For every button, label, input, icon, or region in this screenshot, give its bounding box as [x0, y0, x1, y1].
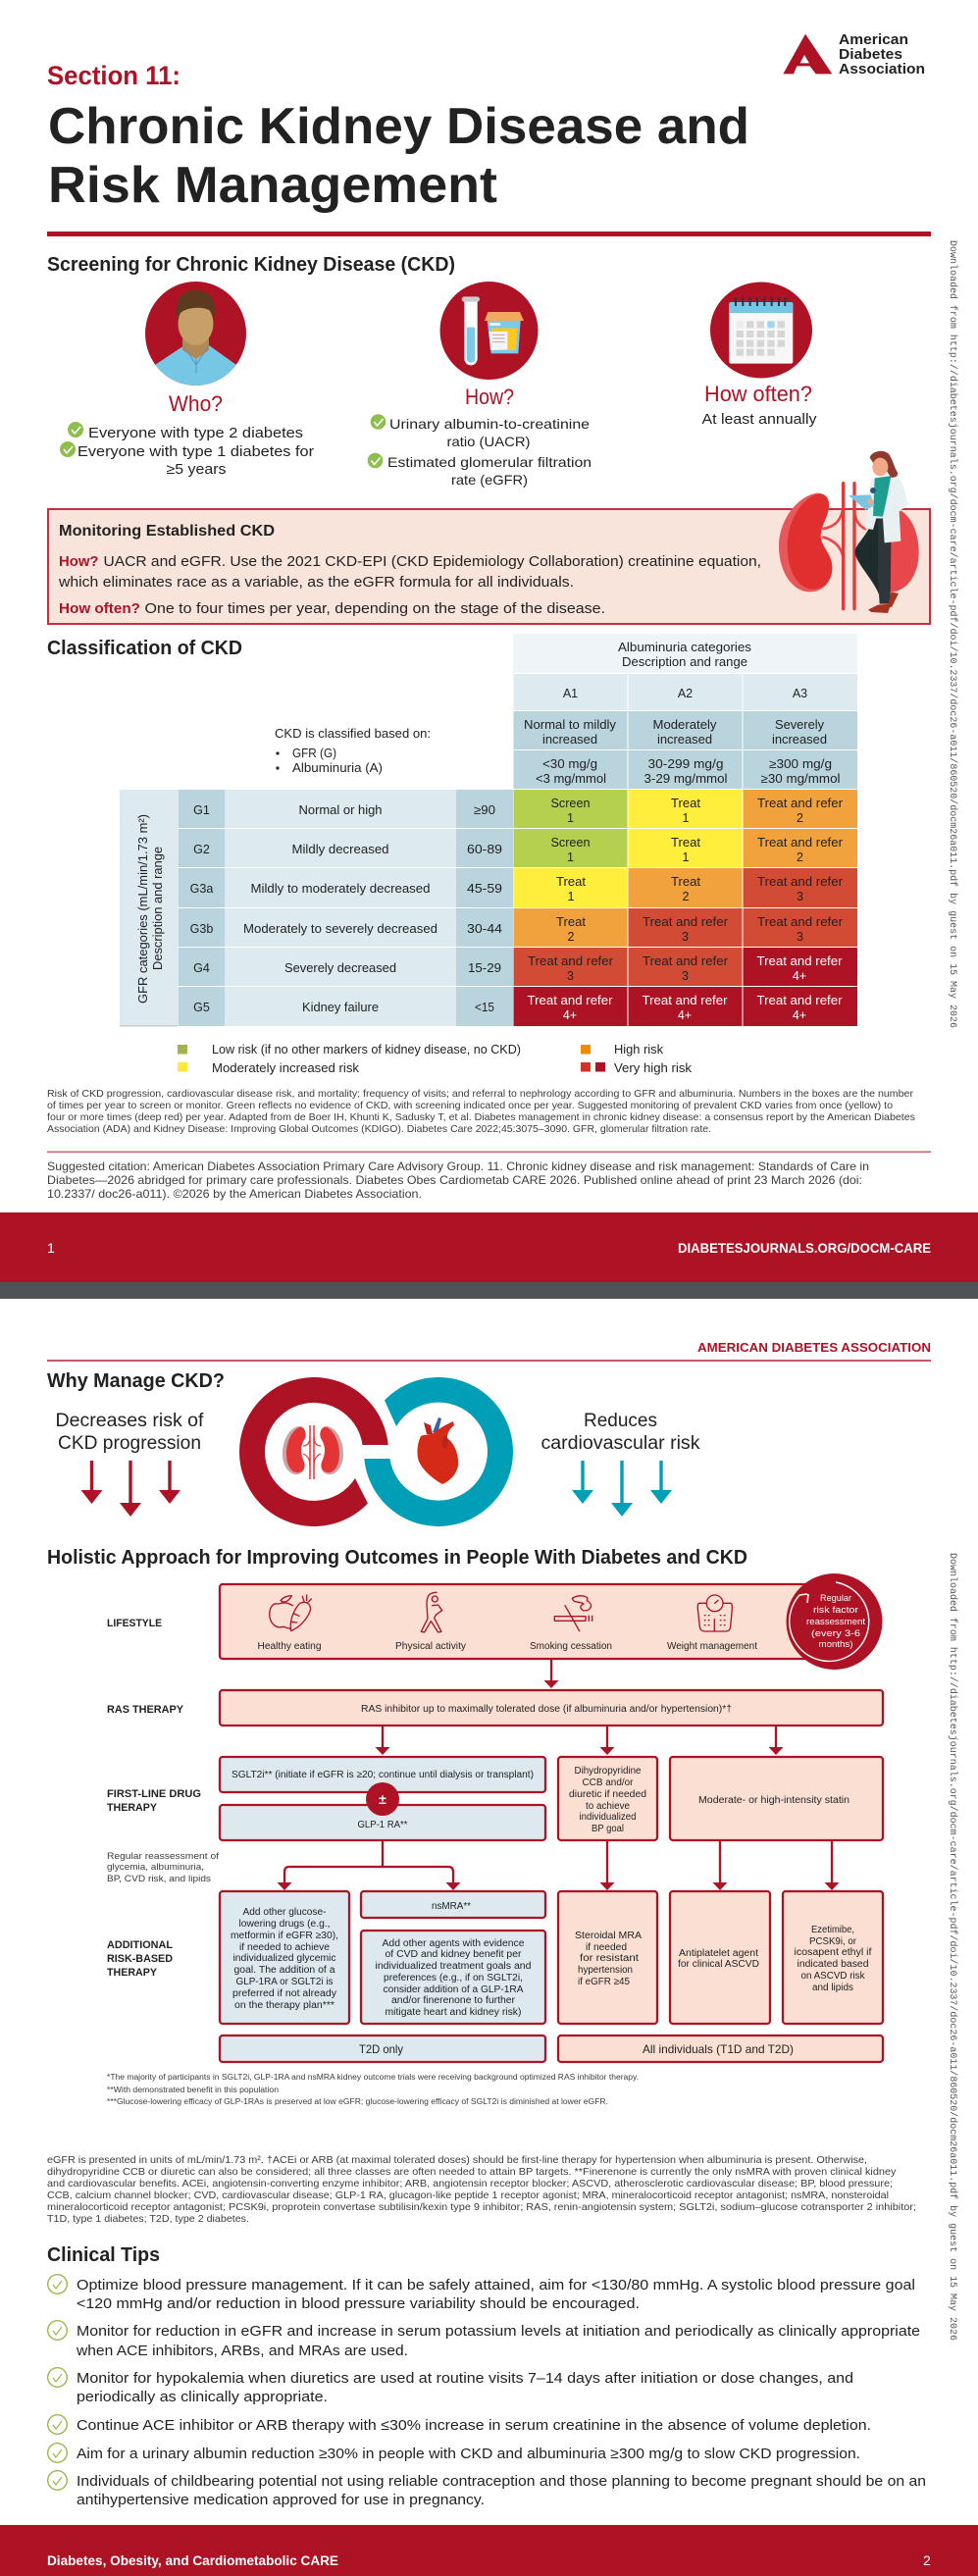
box: other glucose-lowering drugs	[220, 1891, 349, 2024]
box: steroidal MRA	[558, 1891, 657, 2024]
heading: who: Who?	[169, 391, 223, 416]
box: other glucose-lowering drugs: if needed to achieve	[239, 1942, 330, 1953]
table row: G5: Treat and refer	[757, 994, 842, 1007]
text: decreases risk: CKD progression	[58, 1433, 201, 1454]
text: decreases risk: Decreases risk of	[55, 1411, 204, 1431]
arrow: lifestyle to RAS	[543, 1660, 559, 1688]
text: who two	[77, 444, 314, 478]
box: steroidal MRA: Steroidal MRA	[575, 1931, 642, 1941]
box: other glucose-lowering drugs: goal. The addition of a	[233, 1965, 335, 1976]
vertical download note: page 2: Downloaded from http://diabetesjournals.org/docm-care/article-pdf/doi/10.2337/doc26-a011/860520/docm26a011.pdf by guest on 15 May 2026	[948, 1553, 958, 2341]
box: antiplatelet agent: Antiplatelet agent	[679, 1948, 758, 1959]
icon: healthy eating	[270, 1595, 311, 1631]
box: dihydropyridine CCB: CCB and/or	[583, 1777, 634, 1788]
label: additional risk-based therapy: ADDITIONAL	[107, 1939, 173, 1951]
table row: G2: Treat and refer	[757, 836, 843, 850]
table row: G1: Normal or high	[298, 803, 383, 817]
table row: G2: Mildly decreased	[292, 843, 389, 856]
text: CKD is classified based on: Albuminuria (A)	[292, 761, 383, 775]
box: SGLT2i	[220, 1757, 545, 1792]
box: GLP-1 RA	[220, 1805, 545, 1840]
label: RAS therapy: RAS THERAPY	[107, 1704, 184, 1716]
arrows: red downward	[80, 1461, 180, 1517]
heading: how: How?	[465, 385, 514, 409]
text: flowchart footnotes: ***Glucose-lowering efficacy of GLP-1RAs is preserved at low eGFR; glucose-lowering efficacy of SGLT2i is diminished at lower eGFR.	[107, 2097, 608, 2106]
box: other glucose-lowering drugs: preferred if not already	[232, 1988, 336, 1999]
text: suggested citation	[47, 1159, 869, 1201]
tip 3	[48, 2368, 853, 2405]
table row: G3a: Treat	[556, 875, 587, 889]
table header: A3 column	[744, 674, 857, 789]
icon: check	[368, 453, 383, 468]
table header: A3 column: ≥300 mg/g	[769, 757, 832, 771]
list: clinical tips	[48, 2275, 926, 2508]
box: antiplatelet agent	[670, 1891, 770, 2024]
table header: A3 column: Severely	[775, 718, 825, 732]
box: steroidal MRA: if eGFR ≥45	[578, 1977, 630, 1987]
legend: risk levels: Low risk (if no other markers of kidney disease, no CKD)	[212, 1043, 521, 1056]
table row: G2	[179, 829, 857, 867]
logo: American Diabetes Association	[783, 31, 925, 77]
heading: monitoring: Monitoring Established CKD	[59, 523, 275, 540]
text: CKD is classified based on: CKD is classified based on:	[275, 727, 431, 741]
table row: G4: Treat and refer	[643, 954, 728, 968]
box: ezetimibe: on ASCVD risk	[800, 1971, 865, 1982]
tip 1: <120 mmHg and/or reduction in blood pressure variability should be encouraged.	[77, 2295, 640, 2312]
table row: G3a: Treat	[671, 875, 701, 889]
tip 1	[48, 2275, 915, 2312]
heading: clinical tips: Clinical Tips	[47, 2244, 160, 2266]
text: healthy eating: Healthy eating	[257, 1641, 322, 1652]
table row: G3a: Treat and refer	[757, 875, 843, 889]
text: reduces risk	[541, 1411, 700, 1454]
box: other glucose-lowering drugs: GLP-1RA or SGLT2i is	[235, 1977, 334, 1987]
panel: how often	[702, 283, 817, 428]
table row: G2: 2	[797, 850, 803, 864]
icon: heart	[418, 1417, 458, 1484]
text: flowchart footnotes	[107, 2073, 639, 2106]
text: weight management: Weight management	[667, 1641, 757, 1652]
text: uacr: Urinary albumin-to-creatinine	[389, 416, 590, 432]
box: other agents: and/or finerenone to further	[391, 1995, 516, 2006]
table row: G1: Screen	[551, 797, 591, 810]
icon: plus-minus badge	[366, 1782, 399, 1816]
title	[48, 98, 749, 214]
footer: page 1: DIABETESJOURNALS.ORG/DOCM-CARE	[678, 1241, 931, 1256]
box: nsMRA	[361, 1891, 545, 1918]
text: table footnote: Association (ADA) and Kidney Disease: Improving Global Outcomes (KDIGO). Diabetes Care 2022;45:3075–3090. GFR, glomerular filtration rate.	[47, 1123, 711, 1135]
text: abbreviations note: eGFR is presented in units of mL/min/1.73 m². †ACEi or ARB (at maximal tolerated doses) should be first-line therapy for hypertension when albuminuria is present. Otherwise,	[47, 2154, 867, 2166]
box: other glucose-lowering drugs: lowering drugs (e.g.,	[239, 1919, 330, 1930]
box: other agents: of CVD and kidney benefit per	[385, 1949, 522, 1960]
box: ezetimibe: and lipids	[812, 1983, 853, 1993]
box: steroidal MRA: for resistant	[580, 1953, 639, 1964]
text: who two: ≥5 years	[167, 462, 226, 478]
section label: Section 11:	[47, 61, 180, 90]
text: regular reassessment: glycemia, albuminuria,	[107, 1862, 204, 1873]
table row: G1: G1	[193, 803, 210, 817]
table row: G3b: Moderately to severely decreased	[243, 922, 438, 936]
table row: G4: 3	[682, 969, 689, 983]
box: dihydropyridine CCB: Dihydropyridine	[575, 1766, 642, 1777]
tip 1: Optimize blood pressure management. If it can be safely attained, aim for <130/80 mmHg. A systolic blood pressure goal	[77, 2277, 915, 2293]
table row: G4: Severely decreased	[284, 961, 396, 975]
heading: why manage CKD: Why Manage CKD?	[47, 1370, 225, 1392]
text: who two: Everyone with type 1 diabetes for	[77, 444, 314, 460]
box: statin: Moderate- or high-intensity statin	[698, 1795, 849, 1806]
heading: how often: How often?	[704, 382, 812, 406]
table row: G4: 3	[567, 969, 574, 983]
table row: G3a: 3	[797, 890, 803, 903]
callout: regular risk factor reassessment: months)	[818, 1639, 853, 1650]
table row: G3a: 45-59	[467, 882, 502, 896]
icon: physical activity	[421, 1592, 442, 1632]
box: other agents: Add other agents with evidence	[383, 1938, 525, 1949]
box: ezetimibe: Ezetimibe,	[811, 1925, 854, 1935]
tip 2: when ACE inhibitors, ARBs, and MRAs are used.	[76, 2343, 408, 2359]
box: other agents	[361, 1931, 545, 2024]
table header: A2 column: 3-29 mg/mmol	[643, 772, 728, 786]
text: suggested citation: Diabetes—2026 abridged for primary care professionals. Diabetes Obes Cardiometab CARE 2026. Published online ahead of print 23 March 2026 (doi:	[47, 1173, 862, 1187]
text: abbreviations note: dihydropyridine CCB or diuretic can also be considered; all three classes are often needed to attain BP targets. **Finerenone is currently the only nsMRA with proven clinical kidney	[47, 2166, 897, 2178]
ring: heart	[364, 1377, 513, 1526]
text: egfr: rate (eGFR)	[451, 472, 528, 488]
footer: page 1	[0, 1212, 978, 1282]
text: reduces risk: Reduces	[584, 1411, 657, 1431]
box: dihydropyridine CCB: BP goal	[592, 1824, 624, 1834]
table row: G1: Treat and refer	[757, 797, 843, 810]
text: abbreviations note	[47, 2154, 916, 2225]
table row: G3b	[179, 908, 857, 947]
table row: G3a: 1	[568, 890, 575, 903]
tip 6	[48, 2471, 926, 2508]
table row: G5: 4+	[563, 1008, 577, 1022]
box: dihydropyridine CCB: individualized	[579, 1812, 636, 1823]
table row: G4: Treat and refer	[528, 954, 613, 968]
box: dihydropyridine CCB	[558, 1757, 657, 1840]
callout: regular risk factor reassessment: (every 3-6	[811, 1628, 860, 1639]
text: how: UACR and eGFR. Use the 2021 CKD-EPI (CKD Epidemiology Collaboration) creatinine equation,	[104, 553, 761, 570]
text: how	[58, 553, 761, 591]
table row: G1: 1	[567, 811, 574, 825]
text: physical activity: Physical activity	[395, 1641, 466, 1652]
text: uacr	[389, 416, 590, 449]
box: steroidal MRA: if needed	[586, 1942, 627, 1953]
table row: G1: 2	[797, 811, 803, 825]
table side label: GFR categories: GFR categories (mL/min/1.73 m²)	[136, 814, 150, 1004]
text: CKD is classified based on	[275, 727, 431, 775]
table row: G3b: Treat and refer	[643, 915, 728, 929]
callout: regular risk factor reassessment	[787, 1573, 883, 1670]
text: CKD is classified based on: GFR (G)	[292, 747, 336, 760]
text: uacr: ratio (UACR)	[447, 434, 530, 449]
table header: A3 column: increased	[772, 733, 827, 747]
box: other glucose-lowering drugs: on the therapy plan***	[234, 2000, 335, 2011]
table row: G2: G2	[193, 843, 210, 856]
box: GLP-1 RA: GLP-1 RA**	[357, 1820, 408, 1830]
box: antiplatelet agent: for clinical ASCVD	[678, 1959, 759, 1970]
tip 4: Continue ACE inhibitor or ARB therapy with ≤30% increase in serum creatinine in the absence of volume depletion.	[77, 2417, 871, 2434]
footer: page 2	[0, 2525, 978, 2576]
text: table footnote: of times per year to screen or monitor. Green reflects no evidence of CKD, with screening indicated once per year. Suggested monitoring of prevalent CKD varies from once (yellow) to	[47, 1100, 893, 1111]
icon: check	[68, 422, 83, 438]
table row: G5: 4+	[678, 1008, 692, 1022]
table row: G5: <15	[475, 1001, 494, 1014]
table header: A2 column	[628, 674, 742, 789]
table header: albuminuria categories: Albuminuria categories	[618, 641, 751, 654]
icon: man	[145, 282, 246, 387]
box: nsMRA: nsMRA**	[432, 1901, 471, 1912]
box: T2D only: T2D only	[359, 2042, 403, 2056]
footer: page 1: 1	[47, 1240, 55, 1256]
text: egfr: Estimated glomerular filtration	[387, 454, 592, 470]
table header: A2 column: 30-299 mg/g	[647, 757, 724, 771]
footer: page 2: 2	[923, 2552, 931, 2568]
heading: classification: Classification of CKD	[47, 638, 242, 659]
table row: G3b: 3	[797, 930, 803, 944]
table row: G2: Treat	[671, 836, 701, 850]
box: SGLT2i: SGLT2i** (initiate if eGFR is ≥20; continue until dialysis or transplant)	[232, 1770, 534, 1780]
panel: who	[60, 282, 314, 478]
arrows: RAS to first-line	[375, 1726, 783, 1755]
box: statin	[670, 1757, 883, 1840]
box: ezetimibe: indicated based	[797, 1959, 869, 1970]
text: abbreviations note: mineralocorticoid receptor antagonist; PCSK9i, proprotein convertase subtilisin/kexin type 9 inhibitor; RAS, renin-angiotensin system; SGLT2i, sodium–glucose cotransporter 2 inhibitor;	[47, 2201, 916, 2213]
label: first-line drug therapy: THERAPY	[107, 1802, 158, 1814]
arrow: branching from GLP-1 RA	[277, 1841, 461, 1890]
icon: check	[60, 441, 76, 457]
tip 6: antihypertensive medication approved for use in pregnancy.	[77, 2492, 485, 2508]
table row: G3a: Mildly to moderately decreased	[251, 882, 431, 896]
box: dihydropyridine CCB: to achieve	[586, 1801, 630, 1812]
logo: American Diabetes Association: Association	[839, 61, 925, 77]
text: table footnote	[47, 1088, 915, 1135]
diagram: linked rings	[239, 1377, 513, 1526]
box: other glucose-lowering drugs: individualized glycemic	[233, 1953, 335, 1964]
table header: A3 column: A3	[793, 687, 807, 700]
table row: G4: 15-29	[468, 961, 501, 975]
tip 5: Aim for a urinary albumin reduction ≥30% in people with CKD and albuminuria ≥300 mg/g to slow CKD progression.	[77, 2446, 860, 2462]
text: abbreviations note: CCB, calcium channel blocker; CVD, cardiovascular disease; GLP-1 RA, glucagon-like peptide 1 receptor agonist; MRA, mineralocorticoid receptor antagonist; nsMRA, nonsteroidal	[47, 2190, 889, 2201]
panel: monitoring established CKD	[48, 509, 930, 624]
table header: albuminuria categories: Description and range	[622, 655, 747, 669]
table header: A1 column: A1	[563, 687, 578, 700]
table row: G3a: 2	[683, 890, 690, 903]
logo: American Diabetes Association: American	[839, 31, 908, 48]
table header: albuminuria categories	[513, 634, 857, 673]
table row: G3a	[179, 868, 857, 907]
text: reduces risk: cardiovascular risk	[541, 1433, 700, 1454]
box: other glucose-lowering drugs: Add other glucose-	[243, 1907, 326, 1918]
text: who one: Everyone with type 2 diabetes	[88, 426, 303, 441]
box: RAS inhibitor	[220, 1690, 883, 1726]
table row: G2: 1	[683, 850, 690, 864]
ring: kidney	[239, 1377, 388, 1526]
table header: A3 column: ≥30 mg/mmol	[761, 772, 840, 786]
table row: G4: 4+	[793, 969, 806, 983]
text: how often: How often?	[59, 600, 140, 617]
text: regular reassessment	[107, 1851, 219, 1884]
heading: holistic approach: Holistic Approach for Improving Outcomes in People With Diabetes and CKD	[47, 1547, 747, 1569]
table row: G3b: 2	[568, 930, 575, 944]
box: other glucose-lowering drugs: metformin if eGFR ≥30),	[231, 1931, 338, 1941]
panel: lifestyle	[220, 1584, 838, 1659]
box: ezetimibe	[783, 1891, 883, 2024]
label: first-line drug therapy: FIRST-LINE DRUG	[107, 1788, 201, 1800]
label: additional risk-based therapy: THERAPY	[107, 1967, 158, 1979]
table row: G5: Treat and refer	[642, 994, 728, 1007]
box: T2D only	[220, 2035, 545, 2062]
icon: weight management	[697, 1595, 732, 1631]
table row: G5: Kidney failure	[302, 1001, 379, 1014]
table row: G4: G4	[193, 961, 210, 975]
vertical download note: page 1: Downloaded from http://diabetesjournals.org/docm-care/article-pdf/doi/10.2337/doc26-a011/860520/docm26a011.pdf by guest on 15 May 2026	[948, 240, 958, 1028]
icon: kidneys	[283, 1425, 343, 1479]
table side label: GFR categories	[120, 790, 178, 1026]
table row: G3a: G3a	[190, 882, 213, 896]
callout: regular risk factor reassessment: risk factor	[813, 1605, 858, 1616]
text: suggested citation: Suggested citation: American Diabetes Association Primary Care Advisory Group. 11. Chronic kidney disease and risk management: Standards of Care in	[47, 1159, 869, 1173]
text: at least annually: At least annually	[702, 412, 817, 428]
table header: A2 column: increased	[657, 733, 712, 747]
label: lifestyle: LIFESTYLE	[107, 1618, 162, 1629]
table row: G3b: G3b	[190, 922, 213, 936]
table header: A1 column	[514, 674, 628, 789]
arrows: teal downward	[572, 1461, 672, 1517]
box: all individuals: All individuals (T1D and T2D)	[643, 2042, 794, 2056]
tip 3: periodically as clinically appropriate.	[77, 2389, 328, 2405]
box: RAS inhibitor: RAS inhibitor up to maximally tolerated dose (if albuminuria and/or hypertension)*†	[361, 1704, 732, 1715]
legend: risk levels: High risk	[614, 1043, 664, 1056]
footer: page 2: Diabetes, Obesity, and Cardiometabolic CARE	[47, 2553, 338, 2568]
text: abbreviations note: T1D, type 1 diabetes; T2D, type 2 diabetes.	[47, 2213, 249, 2225]
logo: American Diabetes Association: Diabetes	[839, 46, 902, 63]
icon: test tube and cup	[439, 282, 538, 380]
text: table footnote: Risk of CKD progression, cardiovascular disease risk, and mortality; frequency of visits; and referral to nephrology according to GFR and albuminuria. Numbers in the boxes are the number	[47, 1088, 913, 1100]
label: additional risk-based therapy: RISK-BASED	[107, 1953, 173, 1965]
icon: calendar	[710, 283, 812, 379]
text: smoking cessation: Smoking cessation	[530, 1641, 612, 1652]
table row: G2: Screen	[551, 836, 591, 850]
table row: G4	[179, 948, 857, 986]
label: first-line drug therapy	[107, 1788, 201, 1814]
title: Chronic Kidney Disease and	[48, 98, 749, 155]
tip 3: Monitor for hypokalemia when diuretics are used at routine visits 7–14 days after initiation or dose changes, and	[77, 2370, 853, 2387]
table row: G3b: 3	[682, 930, 689, 944]
icon: plus-minus badge: ±	[379, 1791, 386, 1807]
text: how often: One to four times per year, depending on the stage of the disease.	[145, 600, 605, 617]
table row: G5: Treat and refer	[528, 994, 612, 1007]
box: other agents: mitigate heart and kidney risk)	[385, 2007, 522, 2018]
table row: G1: ≥90	[474, 803, 495, 817]
box: other agents: preferences (e.g., if on SGLT2i,	[384, 1973, 523, 1984]
tip 6: Individuals of childbearing potential not using reliable contraception and those planning to become pregnant should be on an	[77, 2473, 926, 2490]
table: CKD classification	[120, 634, 857, 1026]
label: additional risk-based therapy	[107, 1939, 173, 1979]
box: other agents: consider addition of a GLP-1RA	[383, 1984, 524, 1995]
table row: G5: 4+	[793, 1008, 806, 1022]
legend: risk levels	[178, 1043, 693, 1075]
box: other agents: individualized treatment goals and	[375, 1961, 532, 1972]
text: regular reassessment: BP, CVD risk, and lipids	[107, 1874, 211, 1884]
table row: G1: Treat	[671, 797, 701, 810]
title: Risk Management	[48, 157, 497, 214]
box: ezetimibe: icosapent ethyl if	[795, 1947, 872, 1958]
text: regular reassessment: Regular reassessment of	[107, 1851, 219, 1862]
table row: G5: G5	[193, 1001, 210, 1014]
table row: G5	[179, 987, 857, 1026]
text: how: How?	[59, 553, 98, 570]
table row: G2: 60-89	[467, 843, 502, 856]
table row: G3b: Treat	[556, 915, 587, 929]
heading: screening: Screening for Chronic Kidney Disease (CKD)	[47, 254, 455, 276]
arrows: down to additional therapy	[600, 1841, 840, 1890]
table row: G1: 1	[683, 811, 690, 825]
callout: regular risk factor reassessment: reassessment	[806, 1617, 865, 1627]
text: how: which eliminates race as a variable, as the eGFR formula for all individuals.	[58, 574, 574, 591]
table row: G1	[179, 790, 857, 828]
table header: A1 column: <30 mg/g	[542, 757, 597, 771]
box: steroidal MRA: hypertension	[578, 1965, 633, 1976]
page header: American Diabetes Association: AMERICAN DIABETES ASSOCIATION	[697, 1341, 931, 1355]
box: dihydropyridine CCB: diuretic if needed	[569, 1789, 646, 1800]
text: decreases risk	[55, 1411, 204, 1454]
box: all individuals	[558, 2035, 883, 2062]
callout: regular risk factor reassessment: Regular	[820, 1593, 851, 1604]
table header: A1 column: <3 mg/mmol	[536, 772, 606, 786]
illustration: doctor with kidneys	[779, 451, 919, 613]
text: table footnote: four or more times (deep red) per year. Adapted from de Boer IH, Khunti K, Sadusky T, et al. Diabetes management in chronic kidney disease: a consensus report by the American Diabetes	[47, 1111, 915, 1123]
table header: A2 column: Moderately	[653, 718, 717, 732]
table row: G3b: 30-44	[467, 922, 502, 936]
tip 2	[48, 2321, 920, 2359]
table row: G3b: Treat and refer	[757, 915, 843, 929]
text: egfr	[387, 454, 592, 488]
text: flowchart footnotes: *The majority of participants in SGLT2i, GLP-1RA and nsMRA kidney outcome trials were receiving background optimized RAS inhibitor therapy.	[107, 2073, 639, 2082]
tip 2: Monitor for reduction in eGFR and increase in serum potassium levels at initiation and periodically as clinically appropriate	[77, 2323, 920, 2340]
table header: A2 column: A2	[678, 687, 693, 700]
text: flowchart footnotes: **With demonstrated benefit in this population	[107, 2086, 279, 2094]
legend: risk levels: Very high risk	[614, 1061, 693, 1075]
table header: A1 column: Normal to mildly	[524, 718, 617, 732]
icon: smoking cessation	[554, 1596, 592, 1631]
box: ezetimibe: PCSK9i, or	[809, 1936, 857, 1947]
icon: check	[371, 414, 386, 430]
legend: risk levels: Moderately increased risk	[212, 1061, 360, 1075]
table header: A1 column: increased	[542, 733, 597, 747]
panel: how	[368, 282, 592, 488]
table row: G2: 1	[567, 850, 574, 864]
table row: G4: Treat and refer	[757, 954, 842, 968]
text: suggested citation: 10.2337/ doc26-a011). ©2026 by the American Diabetes Association.	[47, 1187, 422, 1201]
text: abbreviations note: and cardiovascular benefits. ACEi, angiotensin-converting enzyme inhibitor; ARB, angiotensin receptor blocker; ASCVD, atherosclerotic cardiovascular disease; BP, blood pressure;	[47, 2178, 893, 2190]
table side label: GFR categories: Description and range	[151, 847, 165, 970]
